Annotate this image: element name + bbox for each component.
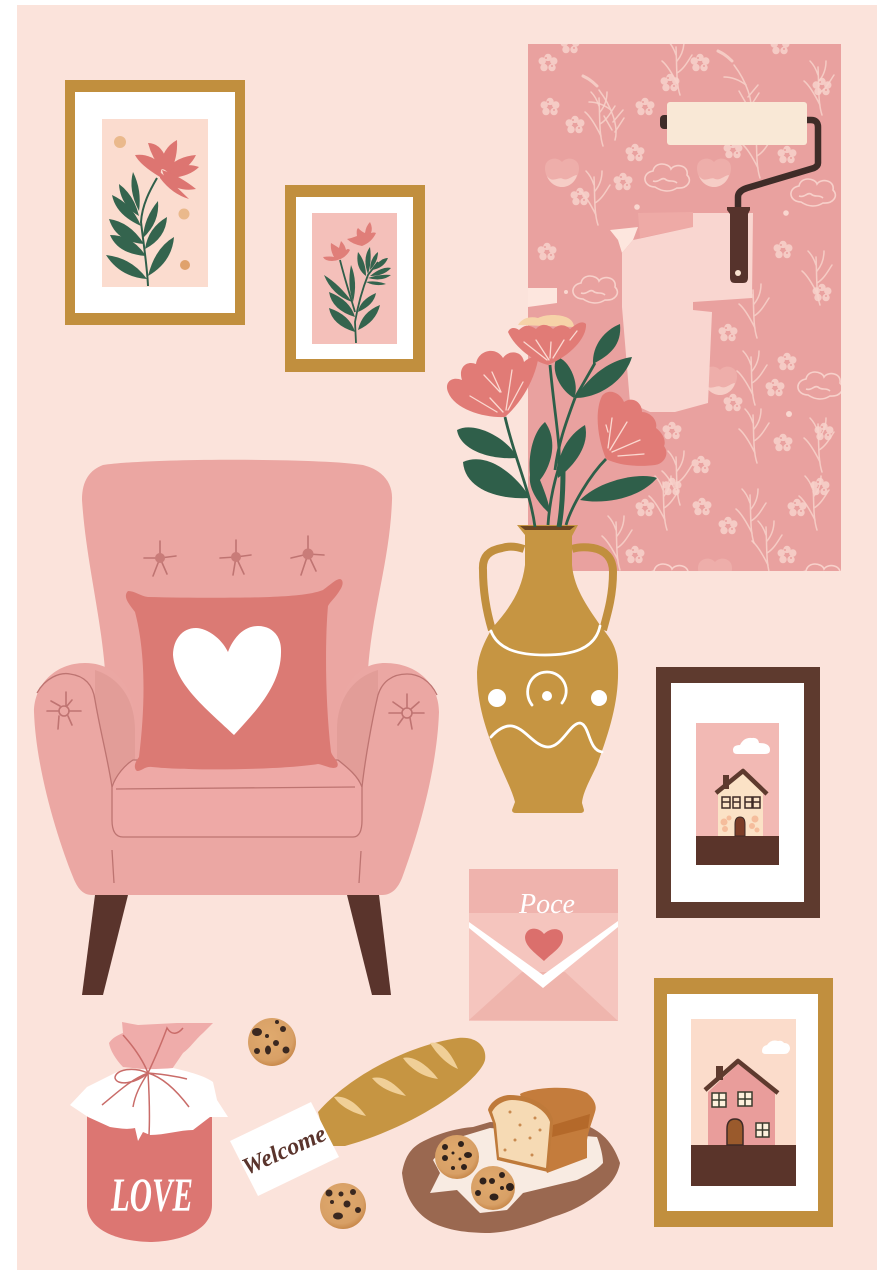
- napkin: [430, 1128, 603, 1213]
- floral wallpaper pattern: [538, 36, 842, 591]
- petal highlights: [470, 331, 644, 456]
- vase: [477, 525, 618, 813]
- ribbon: [102, 1028, 189, 1135]
- flower art: [323, 222, 391, 343]
- inner arm shading: [95, 670, 378, 783]
- top flower: [508, 322, 586, 365]
- painted patch: [528, 212, 753, 412]
- plate with bread and cookies: [402, 1088, 620, 1233]
- plate cookies: [435, 1135, 479, 1179]
- vase mouth: [520, 526, 575, 530]
- flower bud cream: [518, 315, 574, 327]
- armchair: [34, 460, 439, 995]
- left flower: [447, 351, 538, 417]
- pillow: [126, 579, 343, 771]
- cloud: [733, 738, 770, 754]
- leaves: [457, 324, 657, 514]
- love jar: [70, 1022, 228, 1242]
- loaf: [488, 1088, 596, 1173]
- wallpaper panel with paint roller: [528, 36, 842, 591]
- envelope card: [469, 869, 618, 1021]
- flower bouquet: [447, 315, 666, 527]
- cloud: [762, 1040, 790, 1054]
- envelope label: Poce: [518, 889, 575, 920]
- picture frame: top left flower: [65, 80, 245, 325]
- stems: [505, 363, 606, 527]
- envelope heart: [525, 929, 563, 961]
- fabric top: [109, 1022, 213, 1072]
- welcome tag: Welcome: [239, 1121, 331, 1181]
- picture frame: brown house: [656, 667, 820, 918]
- picture frame: second flower: [285, 185, 425, 372]
- welcome tag: [230, 1102, 339, 1196]
- left arm and right arm and base: [34, 663, 439, 895]
- right flower: [598, 392, 666, 466]
- house: [716, 771, 767, 836]
- baguette: [318, 1038, 485, 1146]
- flower art: [106, 136, 199, 286]
- love text: LOVE: [110, 1169, 193, 1222]
- wallpaper: [528, 44, 841, 571]
- house: [705, 1061, 778, 1145]
- vase body: [477, 525, 618, 813]
- cookie: [320, 1183, 366, 1229]
- jar body: [87, 1110, 212, 1242]
- heart: [173, 626, 281, 735]
- paint roller: [660, 102, 818, 283]
- vase decoration: [488, 626, 607, 752]
- back: [82, 460, 392, 800]
- picture frame: gold house: [654, 978, 833, 1227]
- seat cushion: [112, 760, 362, 837]
- tufted buttons: [47, 536, 424, 729]
- cookie: [248, 1018, 296, 1066]
- white cloth: [70, 1068, 228, 1141]
- handles: [483, 547, 613, 630]
- legs: [82, 895, 128, 995]
